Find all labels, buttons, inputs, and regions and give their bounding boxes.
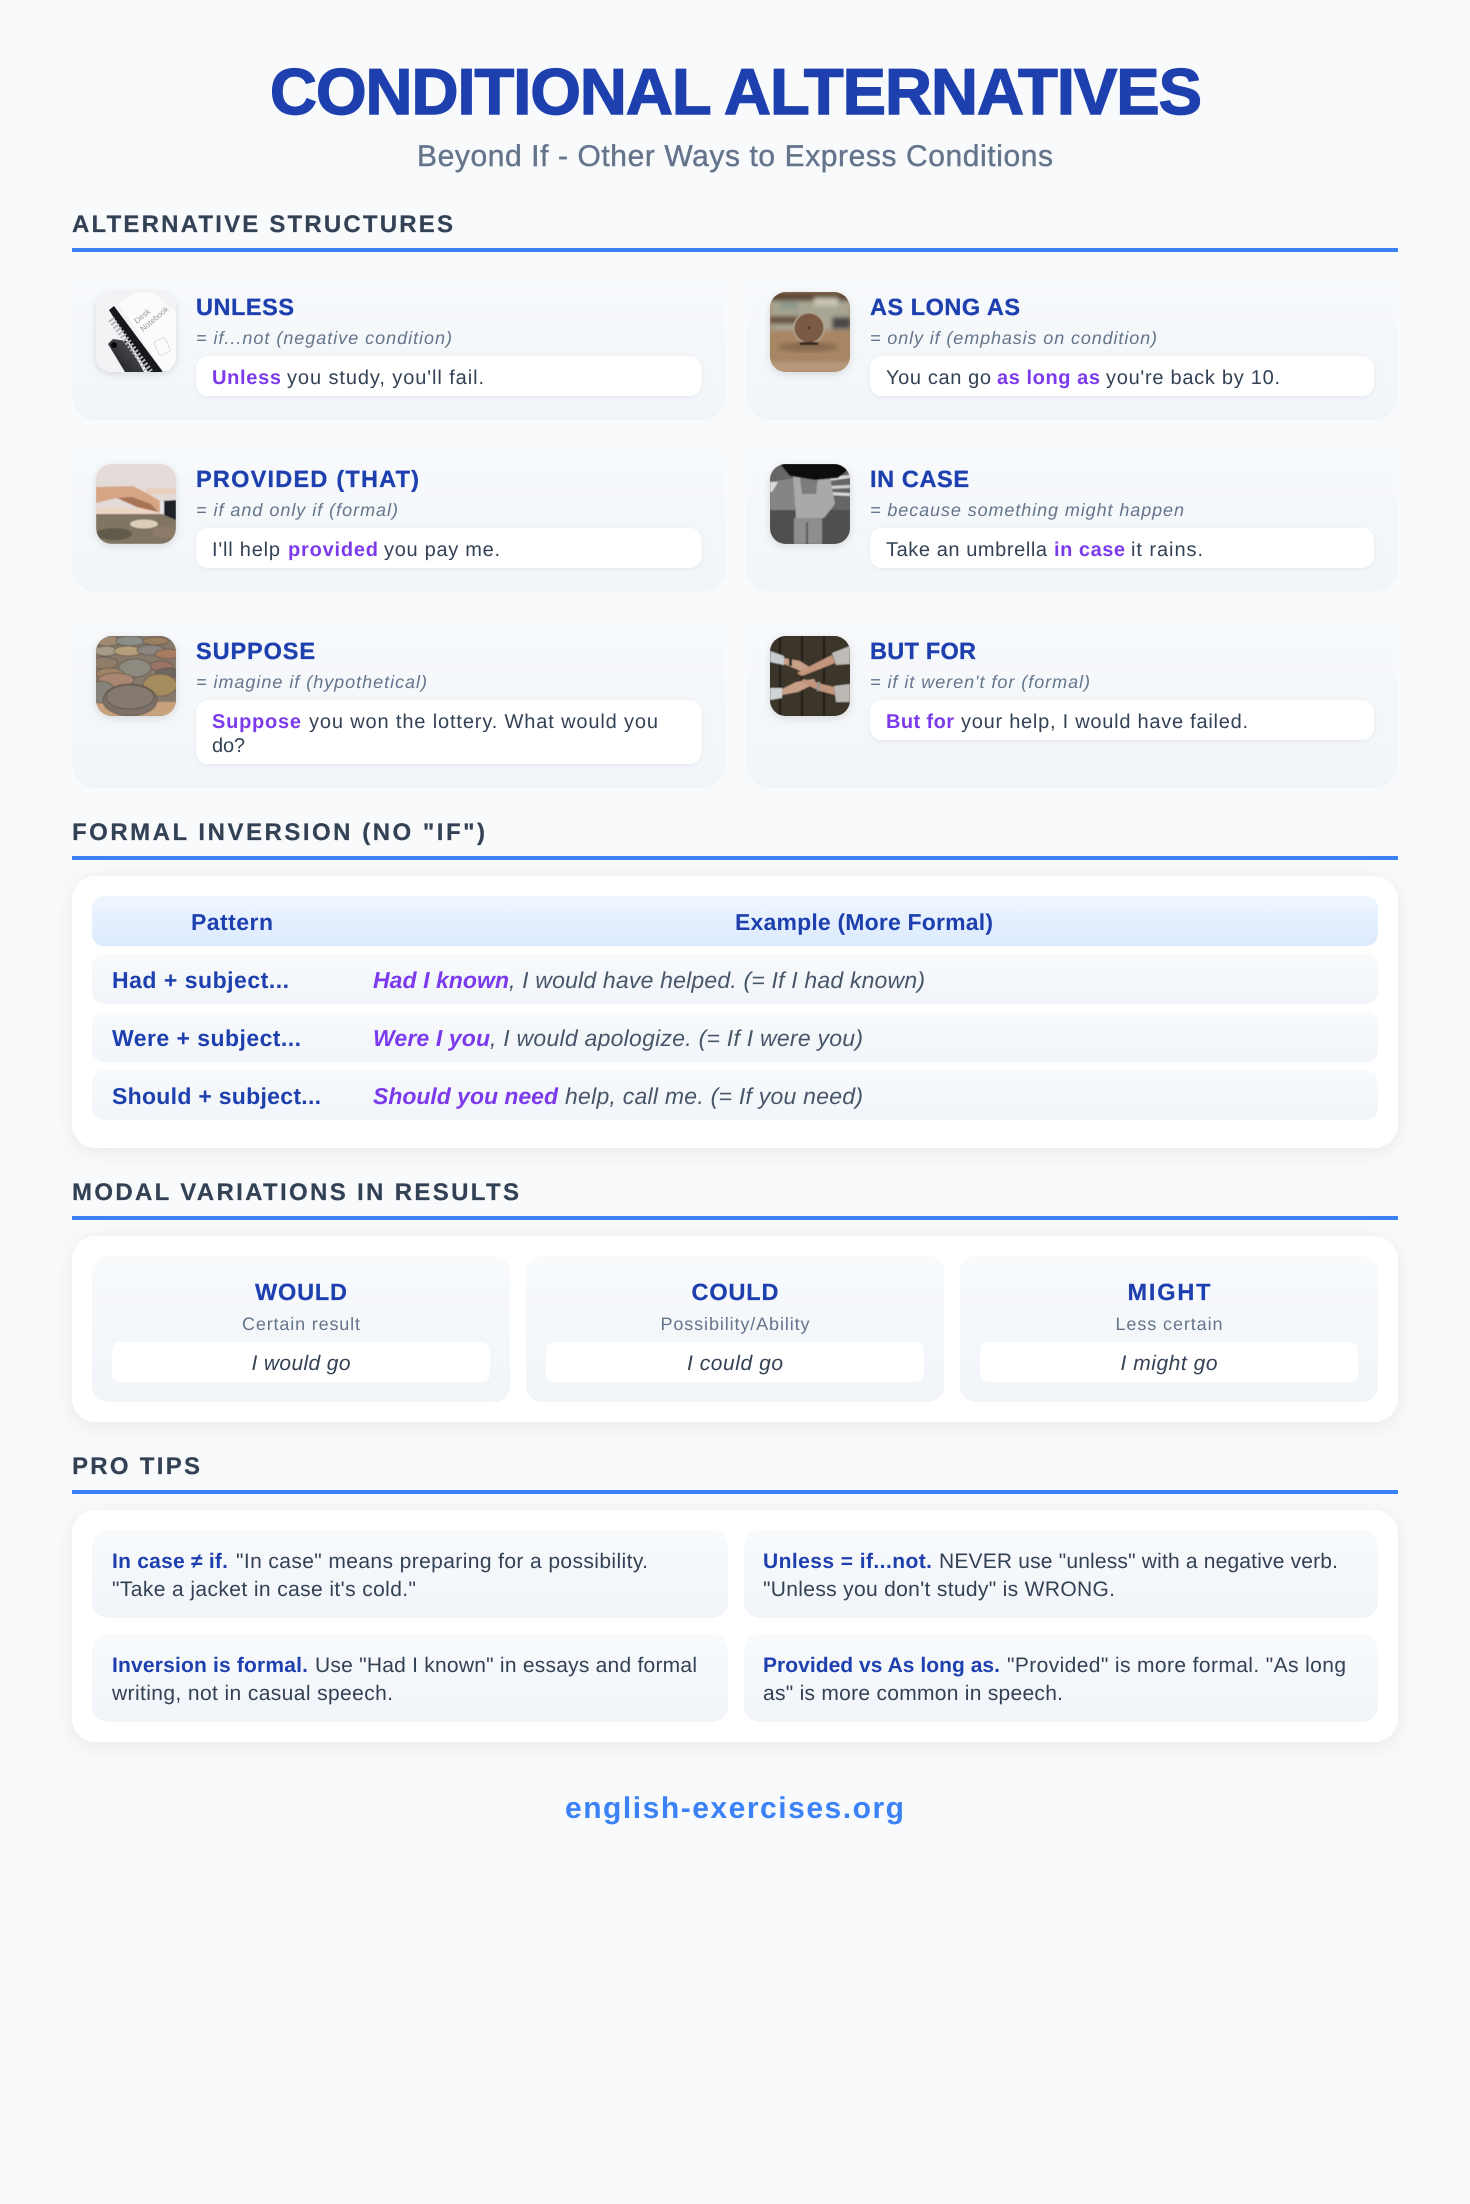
table row: were: Were I you <box>373 1025 490 1051</box>
example: provided: I'll help <box>212 539 280 561</box>
table row: should: Should + subject... <box>112 1083 321 1109</box>
icon: clock photo <box>770 292 850 372</box>
section heading: formal inversion: FORMAL INVERSION (NO "IF") <box>72 819 485 846</box>
tip: in case: "Take a jacket in case it's cold." <box>112 1578 416 1601</box>
panel: as long as card <box>766 291 1376 400</box>
tip: inversion <box>92 1634 728 1722</box>
modal card: would: I would go <box>252 1352 351 1375</box>
example: but for: But for <box>886 711 954 733</box>
modal card: might <box>960 1256 1378 1402</box>
section heading: alternative structures: ALTERNATIVE STRUCTURES <box>72 211 453 238</box>
table row: had: Had + subject... <box>112 967 289 993</box>
section heading: alternative structures <box>72 211 1398 252</box>
modal card: might: Less certain <box>1116 1314 1222 1334</box>
table row: were: Were + subject... <box>112 1025 301 1051</box>
example: unless: Unless <box>212 367 281 389</box>
table header <box>92 896 1378 946</box>
tip: provided vs as long as: Provided vs As long as. <box>763 1654 1000 1677</box>
example: as long as <box>870 356 1374 396</box>
example: suppose <box>196 700 702 764</box>
table row: had <box>92 954 1378 1004</box>
table row: were: , I would apologize. (= If I were you) <box>490 1025 863 1051</box>
table header: Pattern <box>191 909 273 935</box>
example: as long as: as long as <box>997 367 1100 389</box>
panel: but for card <box>766 636 1376 742</box>
panel: provided card <box>92 463 704 571</box>
tip: unless <box>744 1530 1378 1618</box>
tip: in case: In case ≠ if. <box>112 1550 228 1573</box>
panel: formal inversion table <box>72 876 1398 1148</box>
icon: notebook photo: Desk <box>133 306 153 326</box>
card title: in case: IN CASE <box>870 466 969 492</box>
panel: in case card <box>766 463 1376 571</box>
section heading: pro tips <box>72 1453 1398 1494</box>
card meaning: provided: = if and only if (formal) <box>196 500 398 520</box>
icon: notebook photo <box>96 287 186 372</box>
footer: website: english-exercises.org <box>565 1792 904 1825</box>
table row: had: , I would have helped. (= If I had known) <box>509 967 925 993</box>
panel: suppose card <box>92 636 704 768</box>
tip: provided vs as long as <box>744 1634 1378 1722</box>
example: provided: provided <box>288 539 378 561</box>
modal card: would: WOULD <box>255 1279 347 1305</box>
tip: inversion: writing, not in casual speech. <box>111 1682 393 1705</box>
example: unless <box>196 356 702 396</box>
card title: but for: BUT FOR <box>870 638 976 664</box>
section heading: pro tips: PRO TIPS <box>72 1453 200 1480</box>
tip: inversion: Inversion is formal. <box>112 1654 308 1677</box>
tip: provided vs as long as: as" is more common in speech. <box>763 1682 1063 1705</box>
panel: unless card <box>92 291 704 400</box>
table row: were <box>92 1012 1378 1062</box>
tip: unless: Unless = if...not. <box>763 1550 932 1573</box>
icon: coins photo <box>87 636 181 716</box>
table row: should: help, call me. (= If you need) <box>565 1083 863 1109</box>
modal card: would <box>92 1256 510 1402</box>
example: in case: in case <box>1054 539 1125 561</box>
section heading: modal variations: MODAL VARIATIONS IN RESULTS <box>72 1179 519 1206</box>
example: in case: it rains. <box>1131 539 1203 561</box>
icon: joined hands photo <box>770 636 850 716</box>
example: in case <box>870 528 1374 568</box>
card meaning: as long as: = only if (emphasis on condition) <box>870 328 1157 348</box>
card meaning: suppose: = imagine if (hypothetical) <box>196 672 427 692</box>
modal card: could <box>526 1256 944 1402</box>
tip: inversion: Use "Had I known" in essays and formal <box>315 1654 697 1677</box>
title: CONDITIONAL ALTERNATIVES <box>270 55 1202 128</box>
example: as long as: You can go <box>886 367 991 389</box>
icon: holding hands photo <box>96 464 176 544</box>
table header: Example (More Formal) <box>735 909 993 935</box>
modal card: could: I could go <box>687 1352 783 1375</box>
subtitle: Beyond If - Other Ways to Express Conditions <box>417 140 1053 173</box>
tip: unless: "Unless you don't study" is WRONG. <box>763 1578 1115 1601</box>
table row: should <box>92 1070 1378 1120</box>
section heading: modal variations <box>72 1179 1398 1220</box>
modal card: could: Possibility/Ability <box>660 1314 810 1334</box>
tip: unless: NEVER use "unless" with a negative verb. <box>939 1550 1338 1573</box>
table row: had: Had I known <box>373 967 509 993</box>
modal card: might: MIGHT <box>1128 1279 1211 1305</box>
card title: unless: UNLESS <box>196 294 294 320</box>
card meaning: unless: = if...not (negative condition) <box>196 328 452 348</box>
example: as long as: you're back by 10. <box>1106 367 1280 389</box>
card title: suppose: SUPPOSE <box>196 638 315 664</box>
example: but for: your help, I would have failed. <box>961 711 1248 733</box>
card title: provided: PROVIDED (THAT) <box>196 466 419 492</box>
example: suppose: you won the lottery. What would you <box>309 711 658 733</box>
icon: notebook photo: Notebook <box>139 304 171 334</box>
icon: umbrella photo <box>770 464 850 544</box>
section heading: formal inversion <box>72 819 1398 860</box>
tip: in case <box>92 1530 728 1618</box>
tip: in case: "In case" means preparing for a possibility. <box>236 1550 648 1573</box>
table row: should: Should you need <box>373 1083 559 1109</box>
modal card: could: COULD <box>692 1279 778 1305</box>
modal card: might: I might go <box>1120 1352 1218 1375</box>
example: but for <box>870 700 1374 740</box>
example: suppose: do? <box>212 735 245 757</box>
example: suppose: Suppose <box>212 711 301 733</box>
example: unless: you study, you'll fail. <box>287 367 484 389</box>
card title: as long as: AS LONG AS <box>870 294 1020 320</box>
example: provided: you pay me. <box>384 539 500 561</box>
panel: modal variations <box>72 1236 1398 1422</box>
panel: pro tips <box>72 1510 1398 1742</box>
modal card: would: Certain result <box>242 1314 360 1334</box>
card meaning: in case: = because something might happen <box>870 500 1184 520</box>
example: in case: Take an umbrella <box>886 539 1048 561</box>
tip: provided vs as long as: "Provided" is more formal. "As long <box>1007 1654 1346 1677</box>
card meaning: but for: = if it weren't for (formal) <box>870 672 1090 692</box>
example: provided <box>196 528 702 568</box>
